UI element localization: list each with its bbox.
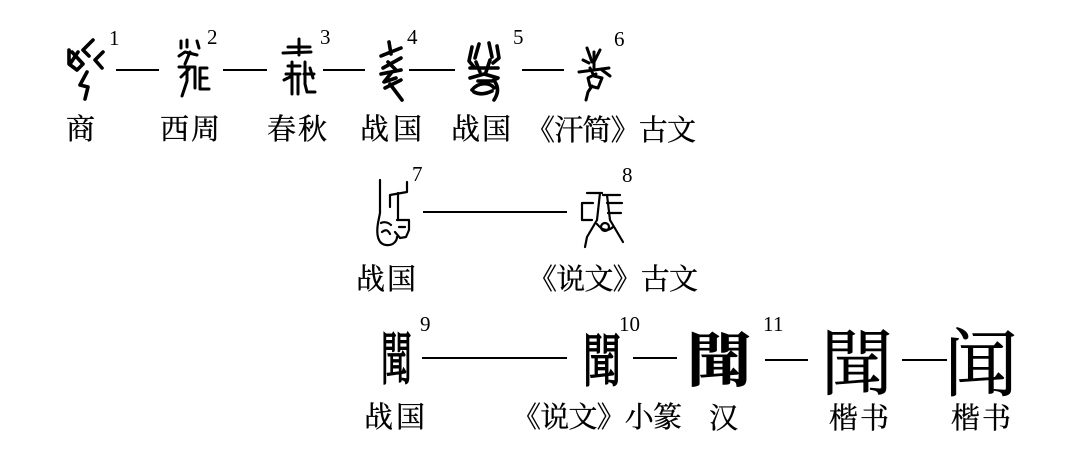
period label: Warring States: 战国 (451, 113, 511, 146)
period label: Warring States: 战国 (364, 401, 425, 434)
form 10 (Shuowen small seal): 聞 (583, 332, 621, 394)
style label: regular script: 楷书 (951, 402, 1011, 435)
icon: archaic form 6 (Hanjian old script) (579, 48, 610, 100)
superscript 8: 8 (622, 163, 632, 187)
superscript 10: 10 (619, 312, 640, 336)
superscript 1: 1 (109, 26, 120, 50)
connector line (409, 69, 455, 71)
icon: archaic form 3 (Spring and Autumn) (283, 39, 315, 94)
connector line (422, 357, 567, 359)
connector line (223, 69, 267, 71)
row 3: Warring States to regular script (364, 312, 1018, 435)
form: simplified regular script: 闻 (944, 325, 1018, 407)
connector line (633, 357, 677, 359)
icon: archaic form 4 (Warring States) (381, 42, 402, 100)
source label: Shuowen small seal: 《说文》小篆 (512, 401, 682, 434)
icon: archaic form 1 (Shang) (69, 40, 103, 99)
connector line (765, 359, 808, 361)
period label: Han: 汉 (709, 403, 738, 435)
superscript 7: 7 (412, 162, 422, 186)
period label: Warring States: 战国 (360, 113, 422, 146)
icon: archaic form 5 (Warring States) (469, 43, 499, 100)
row 1: evolution from Shang to Hanjian old script (66, 25, 696, 147)
form 11 (Han): 聞 (687, 331, 751, 394)
period label: Western Zhou: 西周 (160, 114, 220, 146)
period label: Warring States: 战国 (356, 263, 416, 296)
source label: Hanjian old script: 《汗简》古文 (526, 114, 696, 147)
icon: archaic form 8 (Shuowen old script) (582, 193, 623, 247)
row 2: Warring States to Shuowen old script (356, 162, 698, 296)
connector line (116, 69, 159, 71)
period label: Shang: 商 (66, 113, 95, 146)
form: traditional regular script: 聞 (821, 325, 893, 405)
superscript 5: 5 (513, 25, 524, 49)
style label: regular script: 楷书 (829, 402, 889, 435)
superscript 6: 6 (614, 27, 624, 51)
connector line (423, 211, 567, 213)
superscript 4: 4 (407, 25, 418, 49)
icon: archaic form 2 (Western Zhou) (179, 40, 209, 96)
source label: Shuowen old script: 《说文》古文 (528, 263, 698, 296)
superscript 9: 9 (420, 312, 430, 336)
form 9 (Warring States): 聞 (381, 328, 412, 391)
connector line (323, 69, 365, 71)
superscript 11: 11 (763, 312, 784, 336)
period label: Spring and Autumn: 春秋 (267, 113, 327, 146)
connector line (902, 359, 947, 361)
connector line (522, 69, 564, 71)
superscript 3: 3 (320, 25, 330, 49)
superscript 2: 2 (207, 25, 218, 49)
icon: archaic form 7 (Warring States) (377, 180, 409, 245)
